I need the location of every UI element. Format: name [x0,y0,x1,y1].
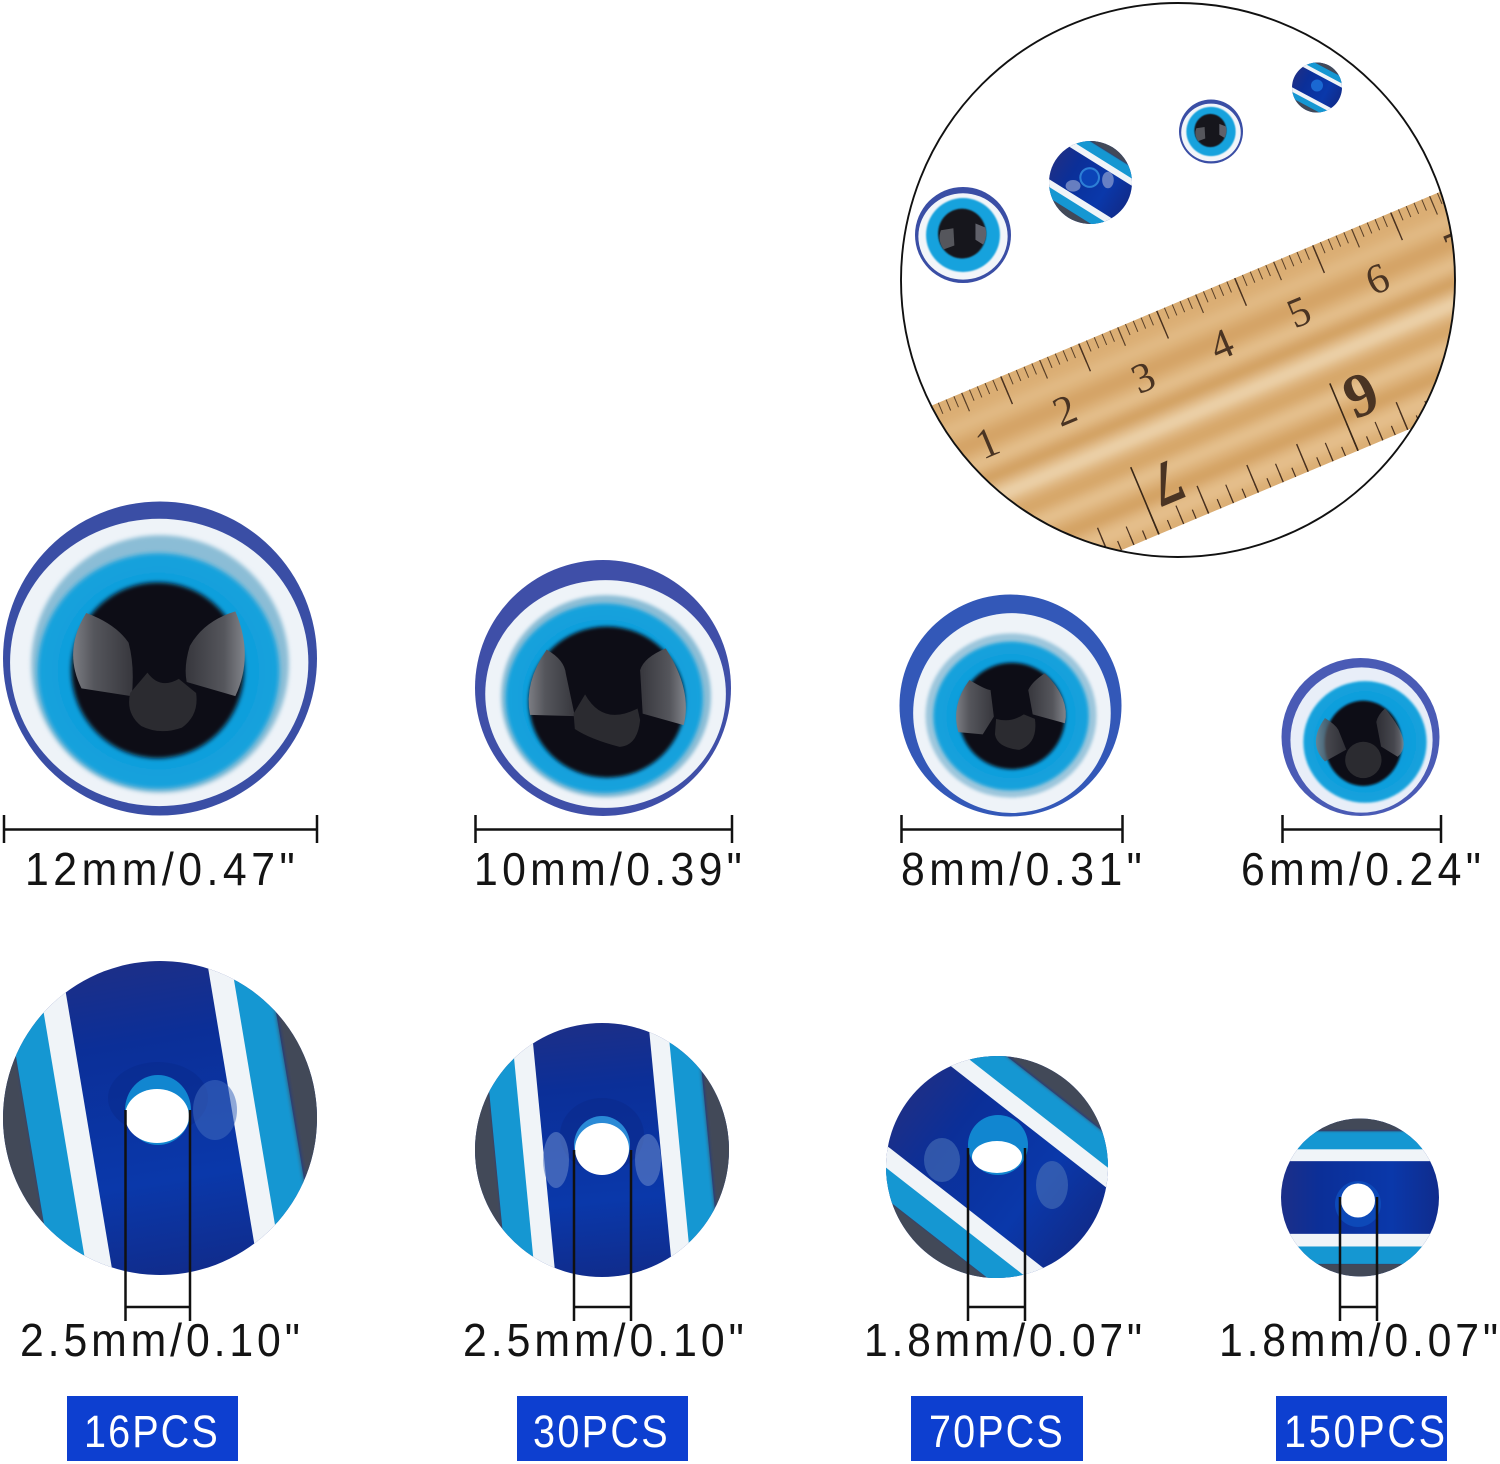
quantity badge [67,1396,238,1461]
hole dimension line [1340,1197,1377,1321]
size label: 10mm/0.39" [474,845,742,895]
panel: magnifier circle with ruler [900,2,1456,558]
small eye bead 12mm [915,187,1011,283]
front eye bead [475,560,731,816]
back bead with hole [1273,1111,1447,1284]
hole dimension line [574,1150,631,1321]
front eye bead [3,502,317,816]
quantity badge: 150PCS [1284,1407,1445,1457]
width dimension line [1282,815,1441,843]
wooden ruler [932,192,1454,550]
quantity badge [911,1396,1083,1461]
ruler numbers: 9 [1334,358,1389,433]
column: 8mm bead [826,594,1168,1461]
ruler numbers: 3 [1125,353,1162,404]
ruler numbers: 5 [1281,288,1318,338]
size label: 8mm/0.31" [901,845,1142,895]
circle outline [901,3,1455,557]
back bead with hole [826,996,1168,1338]
width dimension line [476,815,732,843]
small back bead 6mm [1280,50,1354,125]
column: 6mm bead [1219,658,1498,1461]
size label: 12mm/0.47" [25,845,295,895]
width dimension line [4,815,317,843]
circle background [901,3,1455,557]
size label: 6mm/0.24" [1241,845,1481,895]
ruler numbers: 2 [1047,386,1084,436]
ruler numbers: 1 [969,418,1006,469]
ruler numbers: 4 [1203,320,1240,371]
quantity badge: 16PCS [84,1407,218,1457]
ruler numbers: 7 [1139,445,1194,520]
hole label: 1.8mm/0.07" [864,1316,1142,1366]
quantity badge: 30PCS [533,1407,668,1457]
front eye bead [1282,658,1440,816]
column: 10mm bead [450,560,754,1461]
hole label: 2.5mm/0.10" [20,1316,300,1366]
quantity badge: 70PCS [929,1407,1063,1457]
back bead with hole [450,998,754,1302]
front eye bead [900,594,1122,816]
hole dimension line [968,1148,1025,1321]
back bead with hole [0,919,359,1317]
hole label: 1.8mm/0.07" [1219,1316,1498,1366]
hole label: 2.5mm/0.10" [463,1316,744,1366]
quantity badge [517,1396,688,1461]
small back bead 10mm [1028,120,1153,245]
ruler numbers: 7 [1437,222,1475,272]
hole dimension line [126,1110,190,1321]
ruler numbers [978,234,1451,507]
small eye bead 8mm [1179,100,1243,164]
column: 12mm bead [0,502,359,1461]
width dimension line [902,815,1122,843]
ruler numbers: 6 [1359,255,1396,305]
